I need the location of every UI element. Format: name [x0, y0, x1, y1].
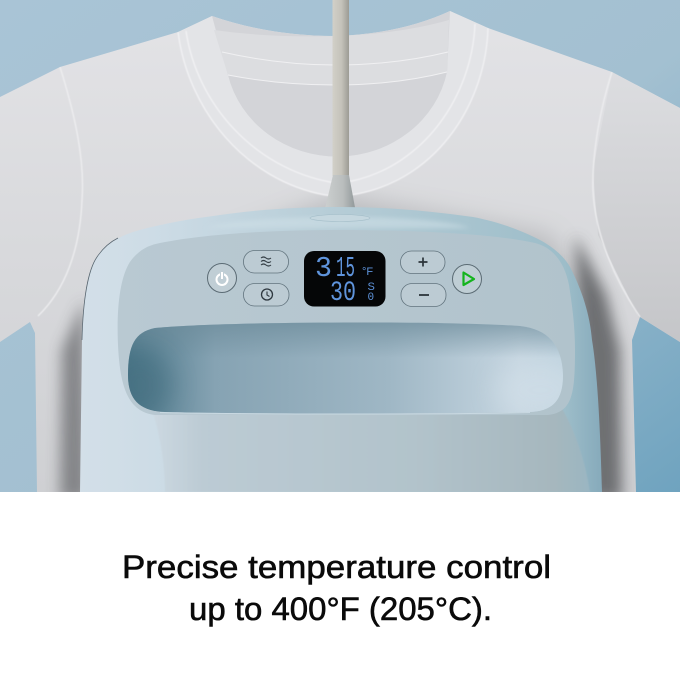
caption heading: up to 400°F (205°C). [189, 591, 492, 627]
photo background [0, 0, 680, 492]
digital display: 30 [330, 278, 356, 309]
lower body panel [170, 410, 590, 492]
button: plus [400, 251, 445, 274]
button: start [452, 264, 482, 294]
caption panel [0, 492, 680, 680]
control face panel [118, 230, 575, 415]
handle opening [128, 322, 563, 414]
digital display: 15 [336, 252, 355, 285]
button: steam waves [244, 250, 288, 273]
photo: t-shirt and heat press [0, 0, 680, 500]
digital display: S [368, 281, 375, 293]
digital display: °F [362, 266, 373, 278]
button: timer [244, 284, 289, 306]
neck interior [212, 11, 450, 156]
digital display: 0 [368, 292, 374, 304]
digital display [304, 251, 386, 309]
heat press body [80, 207, 602, 492]
hose strain relief and cable [326, 0, 355, 208]
t-shirt [0, 11, 680, 500]
button: minus [401, 284, 446, 306]
top dome highlight [258, 217, 462, 228]
digital display: 3 [315, 252, 332, 285]
caption heading [122, 549, 551, 627]
button: power [208, 264, 236, 292]
back neck band [214, 20, 449, 85]
collar band [178, 11, 488, 196]
caption heading: Precise temperature control [122, 549, 551, 585]
